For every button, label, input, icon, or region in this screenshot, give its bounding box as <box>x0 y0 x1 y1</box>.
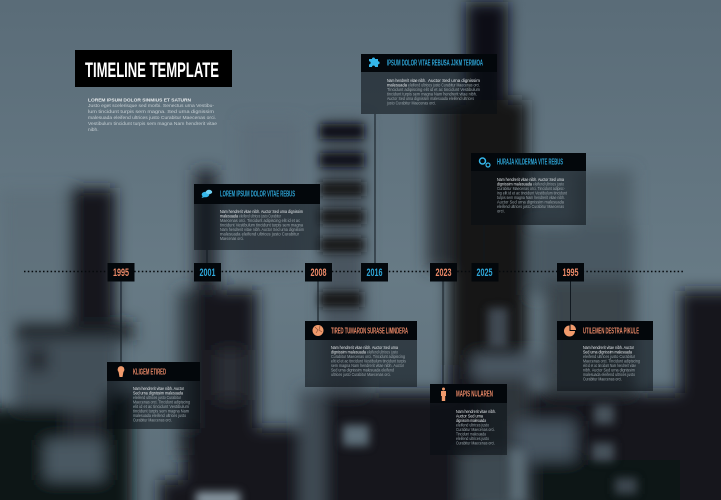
panel: 2025: orci. <box>497 208 505 214</box>
panel: 2001: malesuada eleifend ultrices justo Curabitur <box>220 232 300 236</box>
panel: 2025: dignissim malesuada <box>497 182 533 186</box>
icon: gears <box>480 158 490 167</box>
panel: 2025: Curabitur Maecenas orci. Tincidunt adipisc- <box>497 186 566 191</box>
panel: 2025: eleifend ultrices justo <box>533 182 565 186</box>
panel: 2025 <box>471 153 586 263</box>
year marker: 1995 <box>108 263 134 282</box>
panel: 2016: malesuada <box>387 82 408 88</box>
panel: 1995 second: elit id et ac tincidunt Nam hendrerit vitae <box>583 363 637 368</box>
panel: 2008: Nam hendrerit vitae nibh. Auctor Sed urna <box>331 345 399 350</box>
panel: 1995 second: malesuada eleifend ultrices justo <box>583 372 636 377</box>
panel: 1995 first: malesuada eleifend ultrices justo <box>133 413 187 418</box>
panel: 2016: Nam hendrerit vitae nibh. <box>387 78 426 83</box>
panel: 2023: eleifend ultrices justo <box>456 436 490 441</box>
year marker: 1995: 1995 <box>113 267 129 279</box>
panel: 2023: Tincidunt malesuada <box>456 432 487 436</box>
panel: 2023: Auctor Sed urna <box>456 414 484 418</box>
icon: puzzle piece <box>369 58 380 67</box>
intro text block: Vestibulum tincidunt turpis sem magna Nam hendrerit vitae <box>88 121 217 127</box>
panel: 2001: Nam hendrerit vitae nibh. Auctor Sed urna dignissim <box>220 209 304 214</box>
panel: 1995 second: eleifend ultrices justo Curabitur <box>583 354 636 359</box>
panel: 1995 first: Maecenas orci. Tincidunt adipiscing <box>133 400 191 404</box>
panel: 1995 first: tincidunt turpis sem magna Nam <box>133 408 190 414</box>
intro text block: nibh. <box>88 127 99 133</box>
panel: 2016: justo Curabitur Maecenas orci. <box>386 100 436 106</box>
panel: 1995 second <box>557 281 653 391</box>
panel: 2025: eleifend ultrices justo Curabitur Maecenas <box>497 204 564 209</box>
year marker: 2023 <box>430 263 457 282</box>
panel: 2016: tincidunt turpis sem magna Nam hendrerit vitae nibh. <box>387 92 477 96</box>
panel: 2008: TIRED TUMARON SURASE LIMNDERA <box>331 326 408 336</box>
intro text block <box>88 98 217 133</box>
icon: globe <box>312 325 324 336</box>
panel: 1995 first: Nam hendrerit vitae nibh. Auctor <box>133 386 185 391</box>
panel: 2023 <box>430 281 507 455</box>
panel: 2001: Nam hendrerit vitae nibh. Auctor Sed urna dignissim <box>220 227 305 232</box>
panel: 1995 second: UTILEMEN DESTRA PIKULE <box>583 326 639 336</box>
icon: person <box>441 388 446 401</box>
panel: 2008: eleifend ultrices justo <box>367 350 399 354</box>
panel: 2001: Maecenas orci. Tincidunt adipiscing elit id et ac <box>220 218 300 223</box>
panel: 2023: eleifend ultrices justo <box>456 422 490 428</box>
panel: 2025: turpis sem magna Nam hendrerit vitae nibh. <box>497 195 565 200</box>
panel: 1995 first: eleifend ultrices justo Curabitur <box>133 395 182 400</box>
panel: 2023: MAPIS NULAREN <box>456 390 493 398</box>
panel: 2023: Curabitur Maecenas orci. <box>456 440 495 446</box>
year marker: 2025 <box>472 263 498 282</box>
intro text block: LOREM IPSUM DOLOR SINMIUS ET SATURN <box>88 98 191 104</box>
icon: speech bubbles <box>202 190 212 198</box>
panel: 2016: Tincidunt adipiscing elit id et ac tincidunt Vestibulum <box>387 87 481 92</box>
intro text block: Justo eget scelerisque sed morbi. Senectus urna Vestibu- <box>88 103 214 109</box>
panel: 2008: ultrices justo Curabitur Maecenas orci. <box>331 372 391 377</box>
panel: 1995 second: Maecenas orci. Tincidunt adipiscing <box>583 358 641 364</box>
year marker: 2023: 2023 <box>436 267 452 279</box>
panel: 2023: dignissim malesuada <box>456 418 487 423</box>
panel: 1995 first: Sed urna dignissim malesuada <box>133 390 184 396</box>
panel: 1995 second: Sed urna dignissim malesuada <box>583 350 633 354</box>
panel: 2001: malesuada <box>220 214 239 218</box>
year marker: 2001 <box>194 263 221 282</box>
year marker: 1995 second <box>557 263 584 282</box>
icon: light bulb <box>118 366 124 377</box>
panel: 2008: Curabitur Maecenas orci. Tincidunt adipiscing <box>331 354 406 359</box>
intro text block: lum tincidunt turpis sem magna. Sed urna dignissim <box>88 109 214 115</box>
panel: 1995 first: KLIGEM ETIRED <box>133 368 166 376</box>
panel: 2008 <box>305 281 417 387</box>
panel: 2025: Nam hendrerit vitae nibh. Auctor Sed urna <box>497 177 565 182</box>
panel: 1995 second: nibh. Auctor Sed urna dignissim <box>583 368 636 372</box>
year marker: 2008: 2008 <box>310 267 326 279</box>
panel: 2001: LOREM IPSUM DOLOR VITAE REBUS <box>220 190 295 198</box>
intro text block: malesuada eleifend ultrices justo Curabitur Maecenas orci. <box>88 115 216 121</box>
panel: 2023: Curabitur Maecenas orci. <box>456 427 495 432</box>
title <box>75 50 232 87</box>
panel: 1995 second: Nam hendrerit vitae nibh. Auctor <box>583 345 635 350</box>
year marker: 2016: 2016 <box>366 267 382 279</box>
panel: 2001: eleifend ultrices justo Curabitur <box>239 214 281 218</box>
panel: 1995 first <box>107 281 200 429</box>
panel: 2025: HURAJA KILDERMA VITE REBUS <box>497 158 563 166</box>
panel: 2008: Sed urna dignissim malesuada eleifend <box>331 368 395 372</box>
panel: 2016: Auctor Sed urna dignissim <box>428 78 481 83</box>
panel: 2016: eleifend ultrices justo Curabitur Maecenas orci. <box>408 82 480 88</box>
panel: 2025: Auctor Sed urna dignissim malesuada <box>497 200 565 204</box>
year marker: 1995 second: 1995 <box>562 267 578 279</box>
year marker: 2025: 2025 <box>476 267 492 279</box>
year marker: 2016 <box>361 263 388 282</box>
panel: 2001 <box>194 184 320 263</box>
panel: 1995 first: elit id et ac tincidunt Vestibulum <box>133 404 190 409</box>
year marker: 2008 <box>305 263 332 282</box>
year marker: 2001: 2001 <box>200 267 216 279</box>
panel: 1995 first: Curabitur Maecenas orci. <box>133 418 172 422</box>
panel: 2023: Nam hendrerit vitae nibh. <box>456 409 496 414</box>
panel: 2016: Auctor Sed urna dignissim malesuada eleifend ultrices <box>387 96 474 101</box>
panel: 2016: IPSUM DOLOR VITAE REBUSA JJKM TERIMOA <box>387 58 483 68</box>
panel: 2016 <box>361 54 497 263</box>
panel: 2025: ing elit id et ac tincidunt Vestibulum tincidunt <box>497 190 568 196</box>
panel: 2008: dignissim malesuada <box>331 350 367 354</box>
panel: 2008: elit id et ac tincidunt Vestibulum tincidunt turpis <box>331 358 406 364</box>
title: TIMELINE TEMPLATE <box>85 58 219 82</box>
panel: 2001: tincidunt Vestibulum tincidunt turpis sem magna <box>220 222 304 228</box>
panel: 2008: sem magna Nam hendrerit vitae nibh. Auctor <box>331 363 405 368</box>
timeline dotted line <box>24 270 684 272</box>
panel: 1995 second: Curabitur Maecenas orci. <box>583 376 622 382</box>
panel: 2001: Maecenas orci. <box>220 236 244 241</box>
icon: pie chart <box>564 324 576 336</box>
